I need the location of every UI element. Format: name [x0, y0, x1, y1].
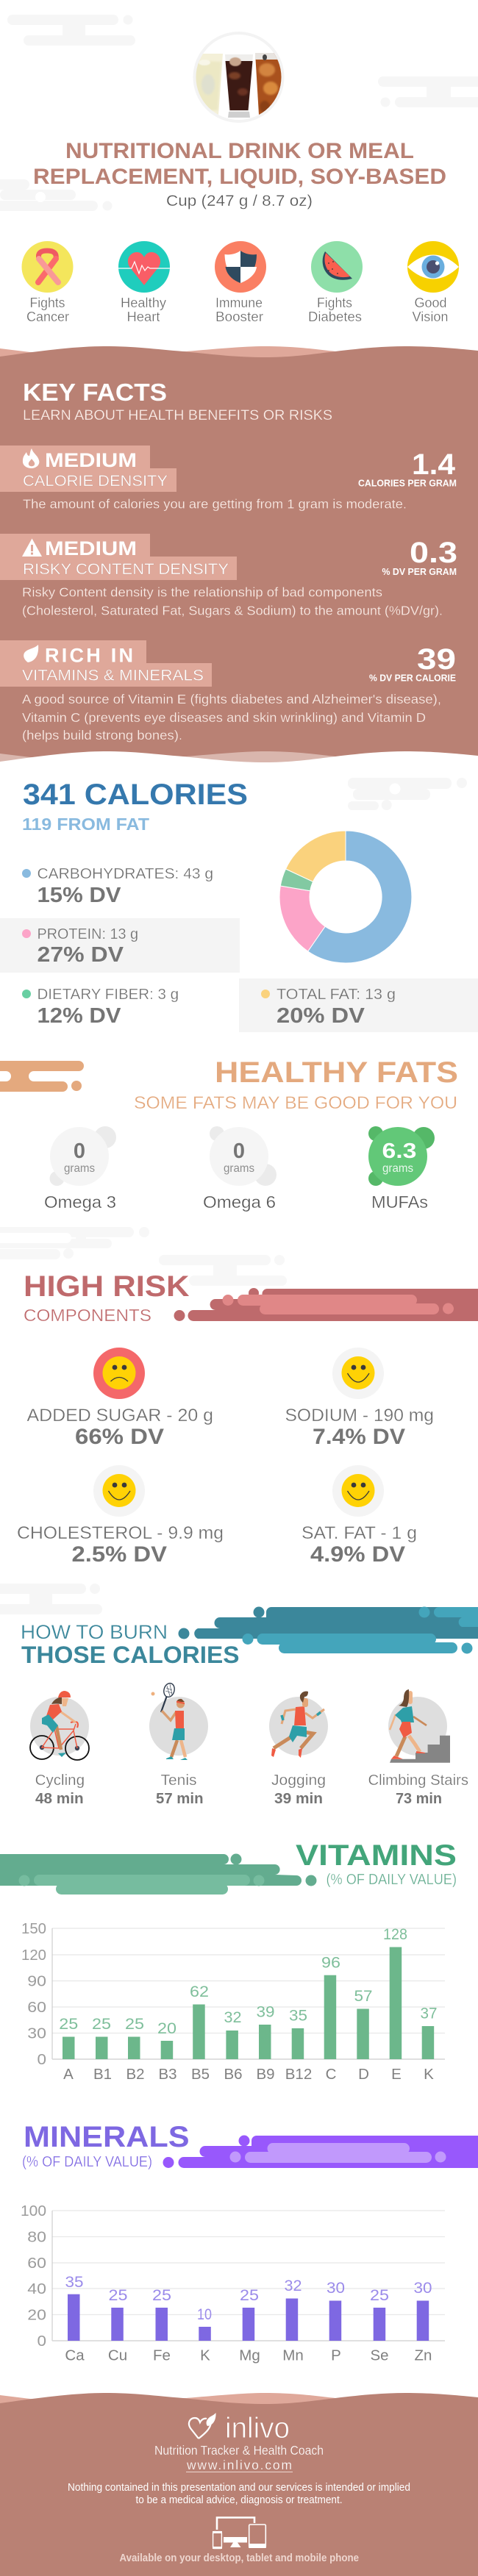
icon: fights diabetes [308, 241, 363, 324]
fact: rich in vitamins and minerals: 39 [417, 643, 456, 676]
title: REPLACEMENT, LIQUID, SOY-BASED [33, 165, 446, 189]
fat: mufas [368, 1126, 435, 1212]
background clouds: header [0, 15, 478, 211]
legend: dietary fiber: DIETARY FIBER: 3 g [37, 986, 179, 1003]
fact: risky content density: (Cholesterol, Saturated Fat, Sugars & Sodium) to the amount (%DV/gr). [22, 603, 443, 618]
icon: fights cancer [22, 241, 74, 324]
heading: high risk: HIGH RISK [24, 1270, 190, 1303]
fat: omega 3 [44, 1126, 116, 1212]
icon: fights diabetes: Fights [317, 296, 352, 310]
fact: risky content density: MEDIUM [45, 537, 137, 559]
activity: tennis: Tenis [160, 1772, 197, 1789]
bar chart: vitamins: E [391, 2066, 402, 2083]
activity: cycling: Cycling [35, 1772, 85, 1789]
bar chart: vitamins: B6 [224, 2066, 243, 2083]
legend: total fat [239, 978, 478, 1032]
donut chart [279, 831, 412, 963]
legend: protein [0, 918, 240, 973]
fact: calorie density: CALORIES PER GRAM [358, 478, 457, 488]
bar chart: vitamins: 60 [27, 1999, 46, 2016]
subheading: LEARN ABOUT HEALTH BENEFITS OR RISKS [23, 407, 332, 423]
component: cholesterol: CHOLESTEROL - 9.9 mg [17, 1523, 224, 1543]
panel: key facts [0, 346, 478, 772]
fat: mufas: MUFAs [371, 1192, 428, 1212]
icon: warning triangle [22, 538, 42, 557]
fact: rich in vitamins and minerals: RICH IN [45, 645, 133, 667]
bar chart: vitamins: 25 [92, 2016, 111, 2033]
icon: healthy heart: Healthy [121, 296, 166, 310]
fact: rich in vitamins and minerals: Vitamin C (prevents eye diseases and skin wrinkling) and Vitamin D [22, 710, 426, 725]
bar chart: vitamins: B9 [256, 2066, 275, 2083]
component: saturated fat [302, 1465, 417, 1567]
bar chart: vitamins: 90 [27, 1973, 46, 1989]
component: sodium [285, 1348, 434, 1449]
fact: calorie density: 1.4 [412, 448, 456, 481]
fact: risky content density: 0.3 [410, 537, 457, 569]
activity: cycling: 48 min [35, 1791, 84, 1807]
fact: calorie density: The amount of calories you are getting from 1 gram is moderate. [23, 497, 407, 512]
title: NUTRITIONAL DRINK OR MEAL [65, 139, 414, 163]
heading: vitamins: VITAMINS [296, 1839, 457, 1872]
bar chart: minerals: Fe [153, 2347, 171, 2364]
bar chart: vitamins: 57 [354, 1988, 372, 2005]
bar chart: minerals: 25 [240, 2287, 259, 2304]
bar chart: minerals: 10 [197, 2306, 212, 2323]
fat: mufas: 6.3 [382, 1139, 416, 1163]
icon: fights cancer: Cancer [26, 310, 69, 324]
fat: omega 3: Omega 3 [44, 1192, 116, 1212]
activity: climbing stairs [368, 1689, 468, 1807]
disclaimer: Nothing contained in this presentation and our services is intended or implied [68, 2481, 410, 2494]
fact: calorie density [0, 446, 457, 512]
activity: climbing stairs: 73 min [396, 1791, 442, 1807]
component: added sugar [26, 1348, 213, 1449]
bar chart: vitamins: 120 [21, 1947, 46, 1964]
bar chart: vitamins: 25 [59, 2016, 78, 2033]
decorative header bar [178, 1607, 478, 1654]
fact: rich in vitamins and minerals [0, 640, 456, 743]
drink photo [193, 32, 287, 123]
fact: risky content density: % DV PER GRAM [382, 567, 457, 577]
milky glass [196, 54, 223, 115]
panel: high risk components [17, 1270, 478, 1567]
legend: protein: PROTEIN: 13 g [37, 926, 138, 942]
legend: carbohydrates [22, 865, 213, 907]
legend: total fat: TOTAL FAT: 13 g [277, 986, 396, 1003]
bar chart: vitamins: B1 [93, 2066, 112, 2083]
background clouds: high risk [0, 1227, 287, 1286]
bar chart: vitamins: C [326, 2066, 337, 2083]
bar chart: minerals: Zn [415, 2347, 432, 2364]
bar chart: minerals: 40 [27, 2280, 46, 2297]
component: cholesterol [17, 1465, 224, 1567]
icon: runner [271, 1692, 324, 1758]
activity: jogging: 39 min [274, 1791, 323, 1807]
bar chart: vitamins: 32 [224, 2009, 241, 2026]
fat: omega 6: Omega 6 [203, 1192, 276, 1212]
fat: mufas: grams [382, 1162, 413, 1175]
icon: good vision [407, 241, 459, 324]
cola glass [225, 54, 253, 118]
background cloud: calories [348, 778, 467, 810]
health benefit icons [22, 241, 459, 324]
amber glass [255, 53, 281, 115]
bar chart: minerals: Mg [239, 2347, 260, 2364]
bar chart: vitamins: D [358, 2066, 369, 2083]
fat: omega 3: grams [64, 1162, 95, 1175]
icon: stairs climber [390, 1689, 450, 1763]
fat: omega 3: 0 [74, 1139, 85, 1163]
heading: how to burn: HOW TO BURN [21, 1621, 168, 1643]
fact: calorie density: MEDIUM [45, 449, 137, 471]
component: saturated fat: 4.9% DV [310, 1542, 405, 1567]
bar chart: vitamins: 0 [37, 2051, 46, 2068]
bar chart: vitamins: B2 [126, 2066, 145, 2083]
bar chart: vitamins: 20 [157, 2020, 176, 2037]
activity: tennis: 57 min [156, 1791, 203, 1807]
bar chart: minerals [21, 2203, 445, 2364]
component: cholesterol: 2.5% DV [72, 1542, 167, 1567]
bar chart: vitamins: 96 [321, 1954, 340, 1972]
fact: risky content density: Risky Content density is the relationship of bad components [22, 585, 382, 600]
heading: key facts: KEY FACTS [23, 379, 167, 406]
legend: protein: 27% DV [37, 943, 124, 967]
bar chart: vitamins: 128 [383, 1926, 407, 1943]
activity: jogging: Jogging [271, 1772, 326, 1789]
availability note: Available on your desktop, tablet and mobile phone [119, 2552, 359, 2564]
fact: calorie density: CALORIE DENSITY [23, 472, 168, 490]
bar chart: minerals: 32 [284, 2278, 302, 2294]
bar chart: minerals: 30 [327, 2280, 345, 2297]
bar chart: vitamins: 37 [421, 2006, 437, 2022]
heading: healthy fats: HEALTHY FATS [215, 1056, 458, 1089]
bar chart: minerals: K [200, 2347, 210, 2364]
tagline: Nutrition Tracker & Health Coach [154, 2443, 324, 2458]
icon: fights cancer: Fights [29, 296, 65, 310]
icon: fights diabetes: Diabetes [308, 310, 362, 324]
bar chart: minerals: 0 [37, 2333, 46, 2350]
icon: good vision: Good [415, 296, 447, 310]
bar chart: minerals: 25 [109, 2287, 128, 2304]
panel: footer [0, 2393, 478, 2576]
icon: tennis player [151, 1682, 188, 1760]
bar chart: minerals: 20 [27, 2307, 46, 2323]
component: saturated fat: SAT. FAT - 1 g [302, 1523, 417, 1543]
background cloud: burn [0, 1584, 102, 1614]
bar chart: minerals: P [331, 2347, 341, 2364]
bar chart: vitamins: 150 [21, 1920, 46, 1937]
icon: devices [213, 2517, 266, 2549]
bar chart: vitamins: 62 [190, 1983, 209, 2000]
fact: rich in vitamins and minerals: A good source of Vitamin E (fights diabetes and Alzheimer's disease), [22, 692, 441, 706]
bar chart: minerals: 25 [370, 2287, 389, 2304]
bar chart: vitamins: 30 [27, 2025, 46, 2042]
component: sodium: SODIUM - 190 mg [285, 1406, 434, 1425]
bar chart: vitamins: 39 [256, 2004, 275, 2020]
fact: risky content density [0, 534, 457, 618]
subheading: daily value: (% OF DAILY VALUE) [22, 2154, 152, 2170]
fact: risky content density: RISKY CONTENT DENSITY [23, 560, 229, 578]
activity: tennis [149, 1682, 208, 1807]
fact: rich in vitamins and minerals: (helps build strong bones). [22, 728, 182, 743]
bar chart: minerals: 30 [413, 2280, 432, 2297]
fact: rich in vitamins and minerals: VITAMINS & MINERALS [22, 667, 204, 684]
bar chart: vitamins: B5 [191, 2066, 210, 2083]
bar chart: minerals: Cu [108, 2347, 127, 2364]
bar chart: vitamins: A [63, 2066, 74, 2083]
heading: calories: 341 CALORIES [23, 779, 248, 811]
fat: omega 6: 0 [233, 1139, 245, 1163]
panel: healthy fats [0, 1056, 458, 1212]
legend: dietary fiber [22, 986, 179, 1028]
bar chart: minerals: 60 [27, 2255, 46, 2272]
website: www.inlivo.com [186, 2458, 292, 2472]
fat: omega 6: grams [224, 1162, 254, 1175]
panel: minerals [21, 2121, 478, 2364]
icon: leaf [24, 645, 38, 662]
decorative header bar [0, 1061, 84, 1092]
icon: healthy heart [118, 241, 170, 324]
bar chart: vitamins: 25 [125, 2016, 144, 2033]
decorative header bar [0, 1854, 316, 1895]
bar chart: minerals: 80 [27, 2229, 46, 2245]
heading: minerals: MINERALS [24, 2121, 190, 2153]
disclaimer [68, 2481, 410, 2506]
panel: calories [0, 779, 478, 1032]
fact: rich in vitamins and minerals: % DV PER CALORIE [369, 673, 456, 684]
icon: flame [23, 448, 39, 468]
subheading: SOME FATS MAY BE GOOD FOR YOU [134, 1093, 457, 1113]
bar chart: minerals: 25 [152, 2287, 171, 2304]
bar chart: minerals: Se [370, 2347, 389, 2364]
legend: carbohydrates: 15% DV [37, 884, 121, 907]
logo: inlivo: inlivo [225, 2412, 290, 2444]
bar chart: minerals: 100 [21, 2203, 46, 2219]
icon: immune booster: Booster [215, 310, 263, 324]
fat: omega 6 [203, 1126, 277, 1212]
disclaimer: to be a medical advice, diagnosis or treatment. [135, 2494, 343, 2506]
bar chart: vitamins: 35 [289, 2007, 307, 2025]
component: sodium: 7.4% DV [313, 1425, 405, 1449]
component: added sugar: ADDED SUGAR - 20 g [26, 1406, 213, 1425]
serving size: Cup (247 g / 8.7 oz) [166, 193, 313, 210]
bar chart: minerals: Ca [65, 2347, 85, 2364]
bar chart: vitamins: K [424, 2066, 434, 2083]
bar chart: minerals: 35 [65, 2274, 84, 2291]
bar chart: minerals: Mn [282, 2347, 304, 2364]
heading: those calories: THOSE CALORIES [21, 1642, 240, 1668]
panel: how to burn those calories [21, 1607, 478, 1807]
bar chart: vitamins [21, 1920, 445, 2083]
activity: climbing stairs: Climbing Stairs [368, 1772, 468, 1789]
subheading: from fat: 119 FROM FAT [22, 815, 149, 834]
icon: immune booster: Immune [215, 296, 263, 310]
panel: vitamins [0, 1839, 457, 2083]
icon: good vision: Vision [412, 310, 449, 324]
legend: carbohydrates: CARBOHYDRATES: 43 g [37, 865, 213, 882]
bar chart: vitamins: B3 [158, 2066, 177, 2083]
icon: healthy heart: Heart [126, 310, 160, 324]
icon: immune booster [215, 241, 266, 324]
subheading: components: COMPONENTS [24, 1306, 151, 1325]
activity: cycling [30, 1691, 89, 1807]
logo: inlivo [189, 2412, 290, 2444]
activity: jogging [269, 1692, 328, 1807]
component: added sugar: 66% DV [75, 1425, 164, 1449]
decorative header bar [174, 1288, 478, 1321]
decorative header bar [163, 2135, 478, 2168]
title [33, 139, 446, 189]
legend: dietary fiber: 12% DV [37, 1004, 121, 1028]
legend: total fat: 20% DV [277, 1004, 365, 1028]
bar chart: vitamins: B12 [285, 2066, 312, 2083]
icon: cyclist [30, 1691, 89, 1760]
subheading: daily value: (% OF DAILY VALUE) [327, 1872, 457, 1888]
